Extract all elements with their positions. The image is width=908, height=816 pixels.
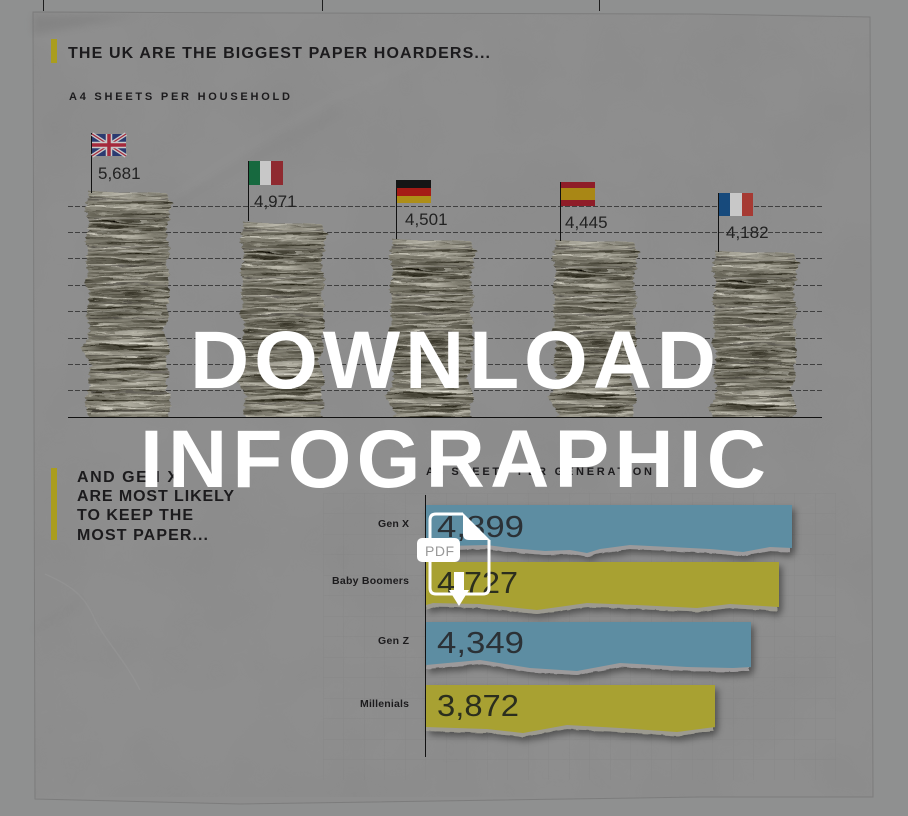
chart: sheets per generation — [332, 495, 792, 757]
bar: Gen Z: 4,349 — [437, 625, 524, 660]
overlay title: download infographic — [140, 315, 766, 505]
top table ticks — [44, 0, 600, 11]
Spain stack: 4,445 — [565, 213, 608, 232]
heading: biggest paper hoarders — [51, 39, 490, 63]
bar: Baby Boomers — [332, 562, 779, 614]
Spain stack — [546, 182, 642, 469]
icon: PDF download: PDF — [425, 543, 454, 559]
flag: France — [719, 193, 753, 216]
heading: Gen X keep the most paper: AND GEN X — [77, 469, 178, 486]
bar: Gen Z: Gen Z — [378, 635, 410, 647]
UK stack — [79, 133, 175, 420]
heading: Gen X keep the most paper: MOST PAPER... — [77, 527, 208, 544]
bar: Gen X: 4,899 — [437, 509, 524, 544]
Germany stack: 4,501 — [405, 210, 448, 229]
bar: Baby Boomers: 4,727 — [437, 565, 518, 600]
flag: Italy — [249, 161, 283, 185]
icon: PDF download — [417, 513, 490, 606]
heading: Gen X keep the most paper: TO KEEP THE — [77, 507, 193, 524]
overlay title: download infographic: DOWNLOAD — [190, 315, 716, 406]
France stack: 4,182 — [726, 223, 769, 242]
Italy stack: 4,971 — [254, 192, 297, 211]
heading: biggest paper hoarders: THE UK ARE THE BIGGEST PAPER HOARDERS... — [68, 45, 490, 62]
bar: Millenials — [360, 685, 715, 737]
Italy stack — [234, 161, 330, 451]
flag: Germany — [396, 180, 431, 203]
heading: Gen X keep the most paper: ARE MOST LIKELY — [77, 488, 234, 505]
subheading: A4 sheets per generation: A4 SHEETS PER GENERATION — [426, 466, 652, 478]
bar: Millenials: Millenials — [360, 698, 409, 710]
subheading: A4 sheets per household: A4 SHEETS PER HOUSEHOLD — [69, 91, 290, 103]
Germany stack — [383, 180, 479, 468]
France stack — [706, 193, 802, 480]
bar: Gen X: Gen X — [378, 518, 409, 530]
bar: Baby Boomers: Baby Boomers — [332, 575, 409, 587]
chart: sheets per household — [68, 133, 822, 480]
UK stack: 5,681 — [98, 164, 141, 183]
bar: Gen X — [378, 505, 792, 557]
bar: Gen Z — [378, 622, 751, 675]
heading: Gen X keep the most paper — [51, 468, 234, 544]
flag: UK — [92, 134, 126, 156]
overlay title: download infographic: INFOGRAPHIC — [140, 414, 766, 505]
bar: Millenials: 3,872 — [437, 688, 519, 723]
flag: Spain — [561, 182, 595, 206]
